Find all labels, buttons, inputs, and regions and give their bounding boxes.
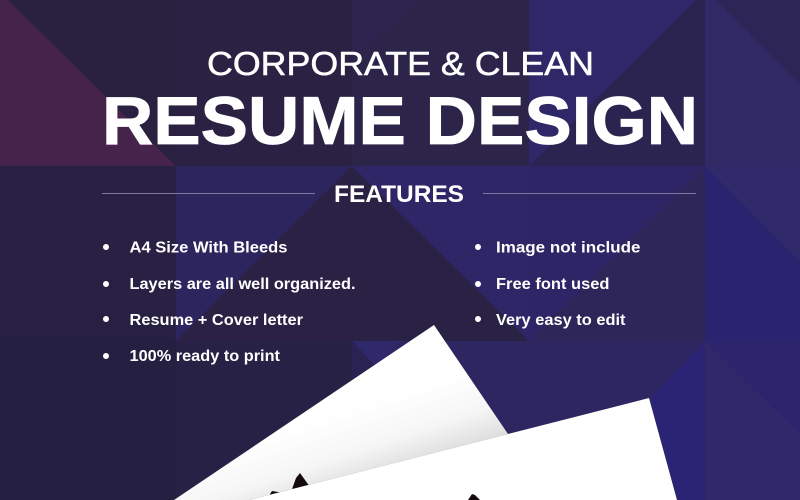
feature list: left column: A4 Size With Bleeds	[130, 240, 288, 256]
feature list: right column: Image not include	[496, 240, 641, 256]
resume sheet: back	[174, 325, 508, 500]
feature list: left column: Layers are all well organized.	[130, 276, 356, 293]
title: corporate and clean: CORPORATE & CLEAN	[207, 45, 594, 82]
section heading: features with rules: FEATURES	[334, 181, 464, 208]
feature list: left column	[103, 240, 356, 365]
feature list: right column	[475, 240, 641, 329]
feature list: right column: Free font used	[496, 276, 610, 293]
feature list: left column: 100% ready to print	[130, 348, 280, 365]
resume sheet: front	[249, 398, 677, 500]
feature list: right column: Very easy to edit	[496, 312, 626, 329]
feature list: left column: Resume + Cover letter	[130, 312, 303, 329]
title: resume design: RESUME DESIGN	[102, 83, 698, 159]
